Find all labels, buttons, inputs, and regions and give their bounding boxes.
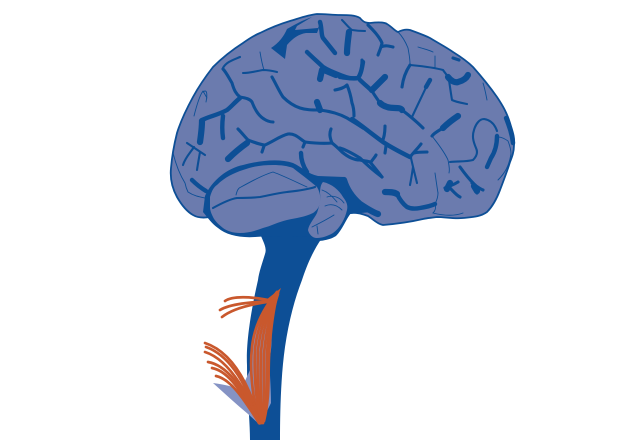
sulci: parietal centre [335, 85, 427, 185]
sulci: central band [173, 129, 382, 214]
cerebellum and temporal fold [203, 160, 372, 240]
cerebrum [171, 14, 514, 240]
cerebellum folds [213, 172, 344, 234]
muscle fibres: lower bundle [205, 343, 260, 423]
sulci: upper frontal [243, 22, 363, 128]
sulcus blob: frontal star [271, 17, 322, 59]
muscle fibres: descending bundle [251, 292, 278, 423]
sulci: lower parietal [385, 192, 438, 213]
brain stem and spinal cord [247, 222, 322, 440]
cortical sulci [173, 17, 513, 215]
muscle fibres: upper bundle [220, 288, 281, 317]
sulci: left frontal [194, 57, 273, 142]
sulci: posterior [432, 116, 513, 215]
muscle backing [213, 308, 272, 425]
sulci: upper parietal [340, 20, 487, 128]
